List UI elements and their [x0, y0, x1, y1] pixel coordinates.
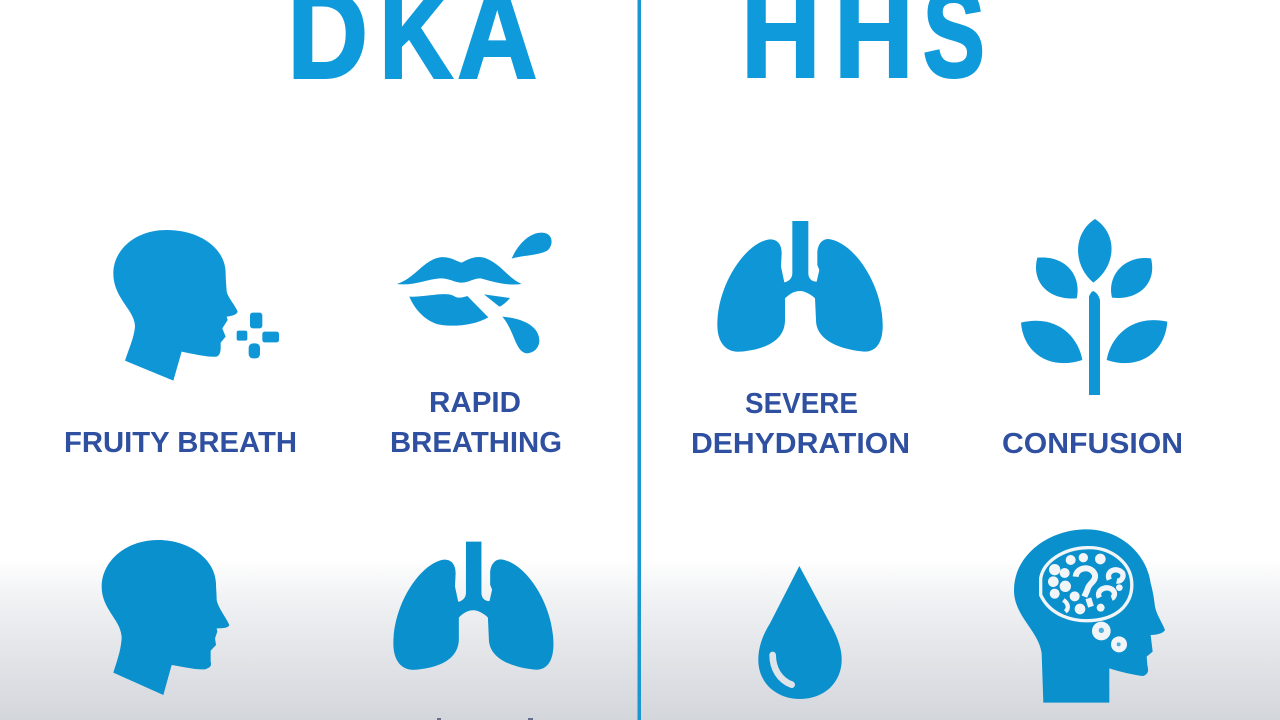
heading: HHS	[741, 0, 985, 104]
label: rapid breathing	[390, 387, 562, 459]
label: severe dehydration: DEHYDRATION	[691, 428, 910, 460]
panel: DKA symptoms	[64, 230, 562, 695]
heading: DKA	[288, 0, 537, 105]
icon: branch with leaves	[1021, 219, 1167, 395]
icon: head profile	[102, 540, 229, 695]
brain with question marks	[1041, 548, 1132, 652]
label: confusion: CONFUSION	[1002, 428, 1183, 460]
panel: HHS symptoms	[691, 219, 1183, 703]
centre divider	[638, 0, 641, 720]
label: rapid breathing: RAPID	[429, 387, 521, 419]
icon: lips with droplets	[397, 233, 552, 353]
label: severe dehydration	[691, 388, 910, 460]
label: fruity breath: FRUITY BREATH	[64, 427, 297, 459]
icon: water drop	[758, 566, 842, 699]
icon: head exhaling fruity breath	[113, 230, 279, 381]
icon: lungs	[393, 542, 553, 670]
label: rapid breathing: BREATHING	[390, 427, 562, 459]
label: severe dehydration: SEVERE	[745, 388, 858, 420]
icon: lungs	[717, 221, 883, 352]
icon: head with confused brain	[1014, 529, 1165, 703]
